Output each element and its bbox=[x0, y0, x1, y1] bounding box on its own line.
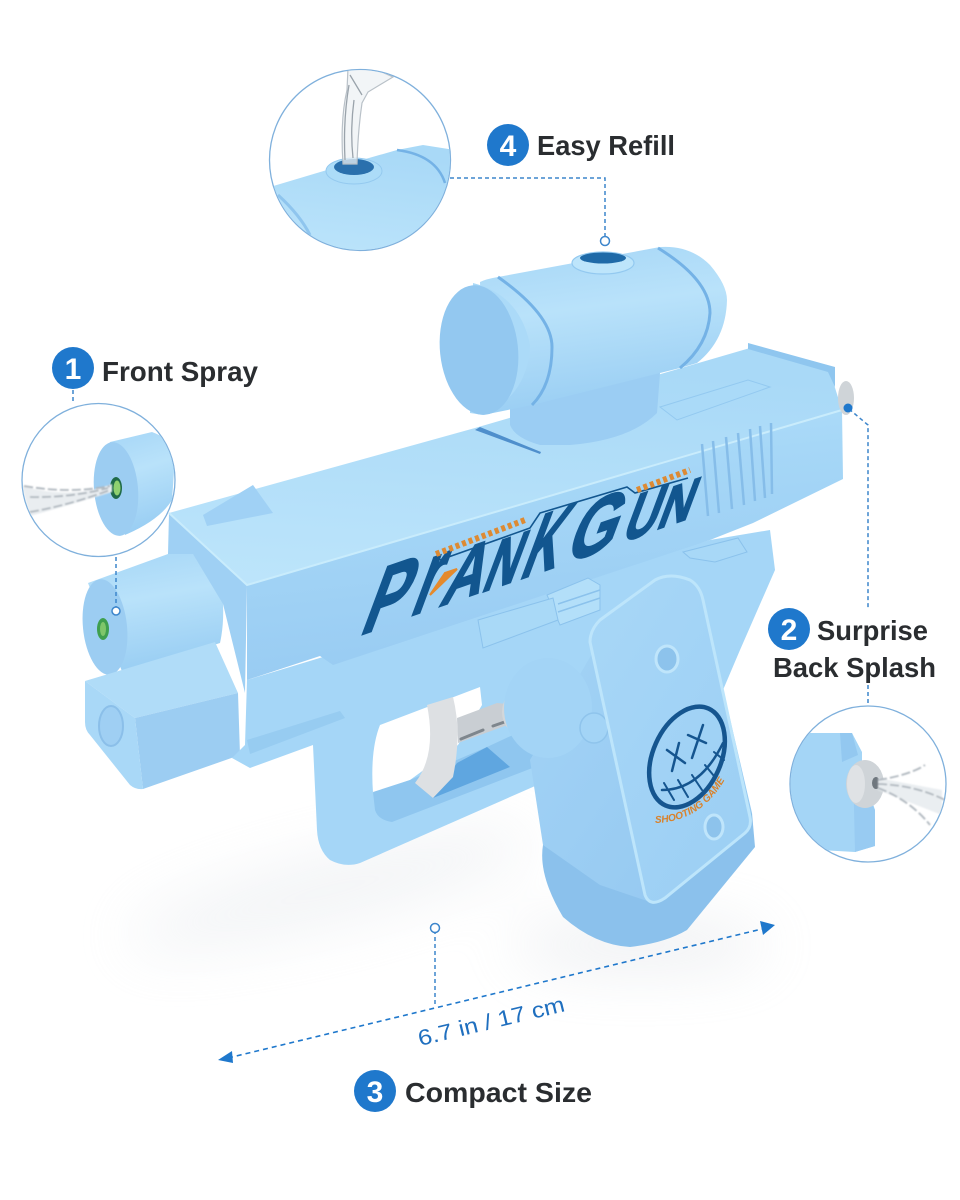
badge 3: 3 bbox=[367, 1076, 383, 1109]
logo: U bbox=[614, 470, 677, 558]
logo: P bbox=[350, 532, 434, 657]
leader 3 bbox=[434, 933, 436, 1004]
grey trigger bbox=[415, 692, 530, 798]
grip panel bbox=[588, 574, 752, 904]
trigger guard and frame bbox=[232, 530, 775, 865]
badge 3 bbox=[354, 1070, 396, 1112]
callout 1: front spray bbox=[52, 347, 258, 615]
anchor 2 bbox=[844, 404, 852, 412]
anchor 1 bbox=[112, 607, 120, 615]
frame bulge bbox=[504, 658, 592, 758]
scope tube bbox=[433, 247, 727, 419]
smiley logo bbox=[634, 695, 740, 819]
logo chevrons bbox=[436, 470, 690, 554]
safety pin bbox=[580, 713, 608, 743]
label 4: Easy Refill bbox=[537, 130, 675, 161]
scope mount bbox=[510, 368, 660, 445]
badge 4: 4 bbox=[500, 130, 517, 163]
guard recess bbox=[433, 747, 510, 798]
slide side bbox=[247, 410, 843, 680]
logo: K bbox=[511, 482, 586, 600]
thumb safety bbox=[683, 538, 747, 562]
grey knob bbox=[846, 760, 884, 808]
pistol illustration bbox=[82, 246, 854, 947]
muzzle barrel bbox=[78, 554, 223, 677]
water spray bbox=[22, 484, 112, 516]
badge 2 bbox=[768, 608, 810, 650]
label 3: Compact Size bbox=[405, 1077, 592, 1108]
badge 1 bbox=[52, 347, 94, 389]
water splash bbox=[878, 765, 945, 825]
rear top plate bbox=[660, 380, 770, 420]
slide edge highlight bbox=[169, 410, 842, 585]
anchor 4 bbox=[600, 236, 610, 246]
detail circle 4 bbox=[270, 68, 455, 260]
slide front face bbox=[168, 513, 247, 693]
anchor 3 bbox=[430, 924, 440, 932]
badge 1: 1 bbox=[65, 353, 81, 386]
badge 2: 2 bbox=[781, 614, 797, 647]
label 1: Front Spray bbox=[102, 356, 258, 387]
logo bbox=[350, 464, 708, 657]
logo: A bbox=[432, 519, 507, 624]
slide stop lever bbox=[478, 578, 600, 648]
back nozzle bbox=[838, 381, 854, 415]
scope slot bbox=[475, 427, 541, 454]
slide top bbox=[169, 348, 842, 585]
detail circle 2 bbox=[785, 706, 946, 862]
water stream bbox=[342, 68, 393, 164]
grip back bbox=[530, 590, 752, 903]
logo: N bbox=[650, 464, 708, 544]
ground shadow bbox=[118, 806, 770, 974]
callout 4: easy refill bbox=[270, 68, 675, 260]
label 2: Surprise bbox=[817, 615, 928, 646]
dimension arrow bbox=[218, 921, 775, 1063]
dimension text: 6.7 in / 17 cm bbox=[415, 992, 567, 1051]
logo: N bbox=[474, 515, 539, 610]
dust cover groove bbox=[247, 711, 345, 754]
rear serrations bbox=[702, 423, 772, 516]
leader 4 bbox=[450, 178, 605, 236]
rear sight bbox=[748, 343, 835, 387]
under rail block bbox=[85, 642, 240, 789]
logo: r bbox=[399, 509, 468, 640]
leader 1 bbox=[73, 390, 116, 607]
grip base plate bbox=[542, 813, 755, 947]
logo: G bbox=[556, 469, 641, 583]
logo rule bbox=[440, 478, 688, 560]
callout 2: surprise back splash bbox=[768, 404, 946, 862]
leader 2 bbox=[849, 409, 868, 706]
refill port bbox=[572, 252, 634, 274]
shooting game text: SHOOTING GAME bbox=[655, 776, 724, 823]
front sight bbox=[203, 485, 273, 526]
detail circle 1 bbox=[22, 404, 175, 556]
badge 4 bbox=[487, 124, 529, 166]
guard floor bbox=[373, 727, 535, 822]
orange swoosh bbox=[430, 569, 457, 595]
label 2: Back Splash bbox=[773, 652, 936, 683]
callout 3: compact size bbox=[218, 921, 775, 1112]
